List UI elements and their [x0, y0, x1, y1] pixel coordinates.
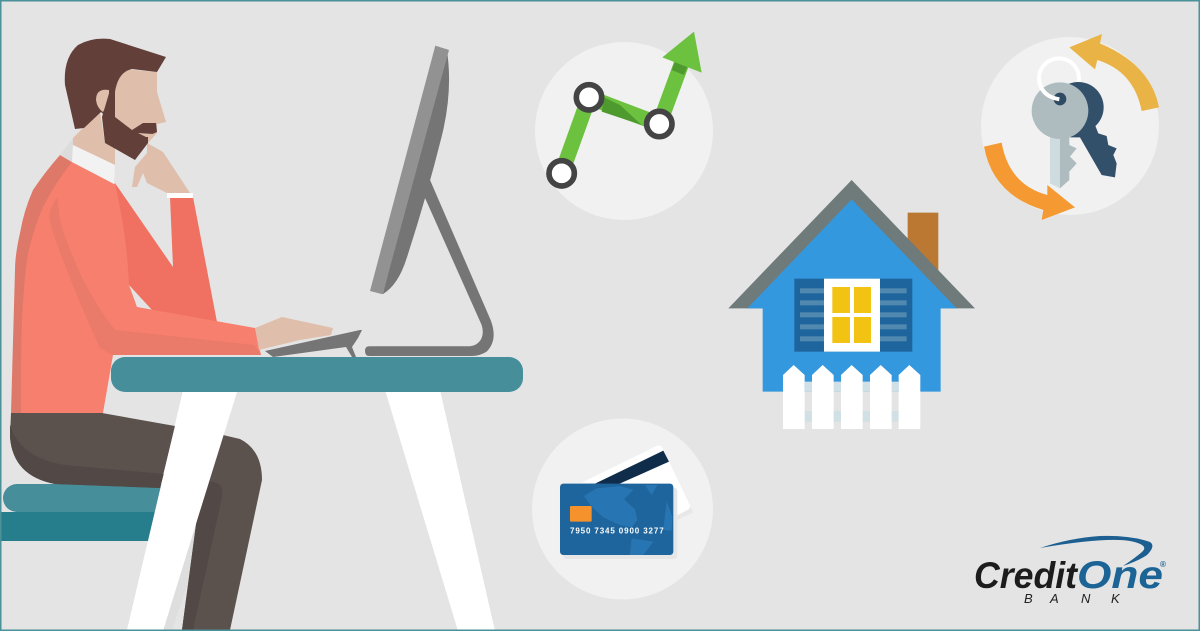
far arm [115, 183, 217, 322]
chart nodes [549, 85, 672, 186]
fence [783, 365, 920, 429]
lip [138, 133, 153, 137]
logo [974, 536, 1166, 606]
shutters [794, 279, 912, 352]
collar [72, 145, 115, 184]
seat base [0, 512, 165, 541]
back card [582, 446, 693, 520]
face [108, 69, 166, 150]
key ring back [1039, 58, 1079, 98]
arm shading [49, 197, 261, 355]
ear [96, 90, 109, 112]
card chip [570, 506, 592, 522]
arrow head [662, 32, 702, 73]
window [824, 279, 880, 352]
card circle [532, 418, 713, 600]
logo: One [1077, 554, 1163, 597]
logo bank text: BANK [1024, 591, 1121, 606]
desk [111, 357, 523, 631]
key shaft [1050, 137, 1060, 188]
monitor stand [365, 178, 494, 356]
keys circle panel [981, 34, 1159, 220]
key hole [1054, 93, 1066, 105]
person [0, 39, 362, 630]
monitor [365, 46, 494, 356]
roof [728, 180, 975, 308]
registered mark: ® [1160, 560, 1166, 569]
logo wordmark: Credit [974, 555, 1079, 596]
hand on chin [132, 143, 190, 193]
trend line [549, 32, 702, 186]
chart circle [535, 42, 713, 220]
seat cushion [3, 484, 173, 512]
beard [102, 90, 157, 160]
key head [1032, 82, 1088, 139]
neck [73, 112, 115, 165]
cuff [167, 193, 193, 198]
desk leg right [385, 390, 495, 631]
monitor back [383, 48, 449, 294]
keyboard [265, 330, 362, 357]
dark key [1053, 82, 1117, 177]
desk leg left [127, 390, 237, 631]
hand on keyboard [255, 317, 333, 350]
house [728, 180, 975, 429]
chimney [908, 213, 938, 273]
hair [65, 39, 166, 129]
orange arrow [984, 143, 1075, 220]
gap under arm [129, 285, 152, 310]
collar shadow [60, 138, 73, 162]
lower leg [182, 435, 262, 630]
card number: 7950 7345 0900 3277 [570, 527, 664, 536]
logo swoosh [1040, 536, 1152, 566]
desk top [111, 357, 523, 392]
house body [747, 199, 957, 392]
card globe [584, 485, 672, 555]
chart circle panel [535, 32, 713, 220]
card circle panel [532, 418, 713, 600]
sweater front [21, 162, 137, 413]
keys circle [981, 37, 1159, 215]
key ring front [1039, 78, 1059, 99]
monitor screen edge [370, 46, 449, 294]
sweater back [11, 155, 72, 413]
near arm [100, 307, 261, 355]
yellow arrow [1069, 34, 1159, 111]
thigh [10, 392, 237, 630]
